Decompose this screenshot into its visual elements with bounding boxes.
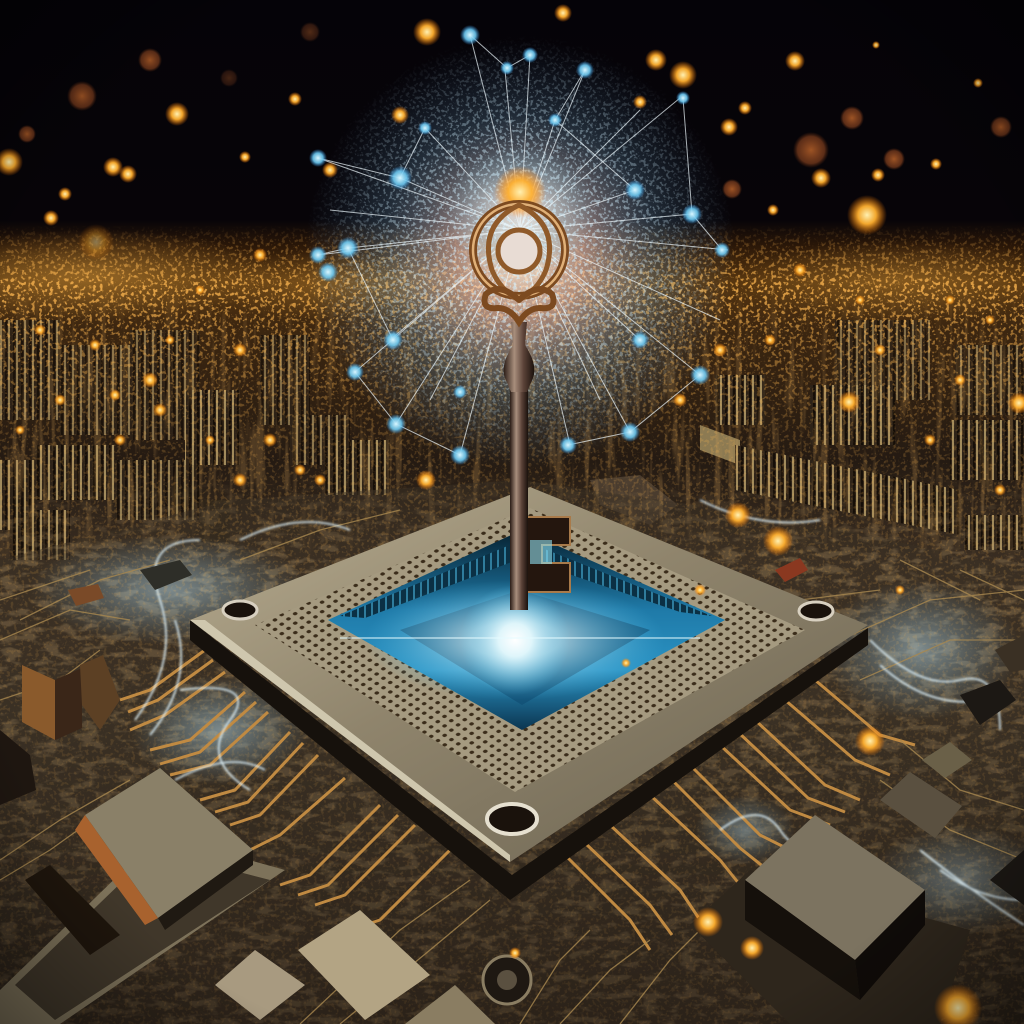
bokeh lights: sky	[0, 4, 1012, 260]
burst rays	[318, 35, 728, 455]
bright chip rim	[190, 620, 510, 862]
circuit board ground	[0, 470, 1024, 1024]
left city blocks	[0, 320, 390, 560]
vertical gold striations across the city	[0, 304, 1024, 552]
large chip: bottom left	[0, 768, 285, 1024]
chip top plate	[190, 487, 868, 862]
light from the socket	[340, 580, 700, 700]
copper traces	[120, 650, 915, 950]
small components right	[775, 558, 1024, 905]
key collar	[504, 322, 534, 392]
burst sparkle texture	[314, 44, 726, 456]
small components left	[0, 560, 192, 805]
blue nodes	[309, 25, 730, 465]
large chip: bottom right	[690, 815, 970, 1024]
distant golden city glow	[0, 230, 1024, 320]
golden key	[473, 166, 570, 610]
right city blocks	[590, 320, 1024, 550]
chip side wall	[190, 620, 868, 900]
key bow	[473, 204, 565, 322]
bottom components	[215, 910, 531, 1024]
key shaft	[510, 388, 528, 610]
electric blue arcs on the board	[135, 500, 1024, 925]
processor chip	[190, 487, 868, 900]
gold speckle lights	[0, 228, 1024, 1024]
thin board circuitry	[0, 510, 1024, 1024]
central socket well	[328, 530, 725, 730]
key bit	[527, 517, 570, 592]
contact dot fields	[255, 508, 805, 792]
socket wall ridges	[340, 540, 712, 618]
energy burst behind the key	[309, 25, 730, 465]
bokeh lights: city and board	[15, 248, 1024, 1024]
key glow crown	[494, 166, 546, 218]
mounting holes	[223, 601, 833, 834]
